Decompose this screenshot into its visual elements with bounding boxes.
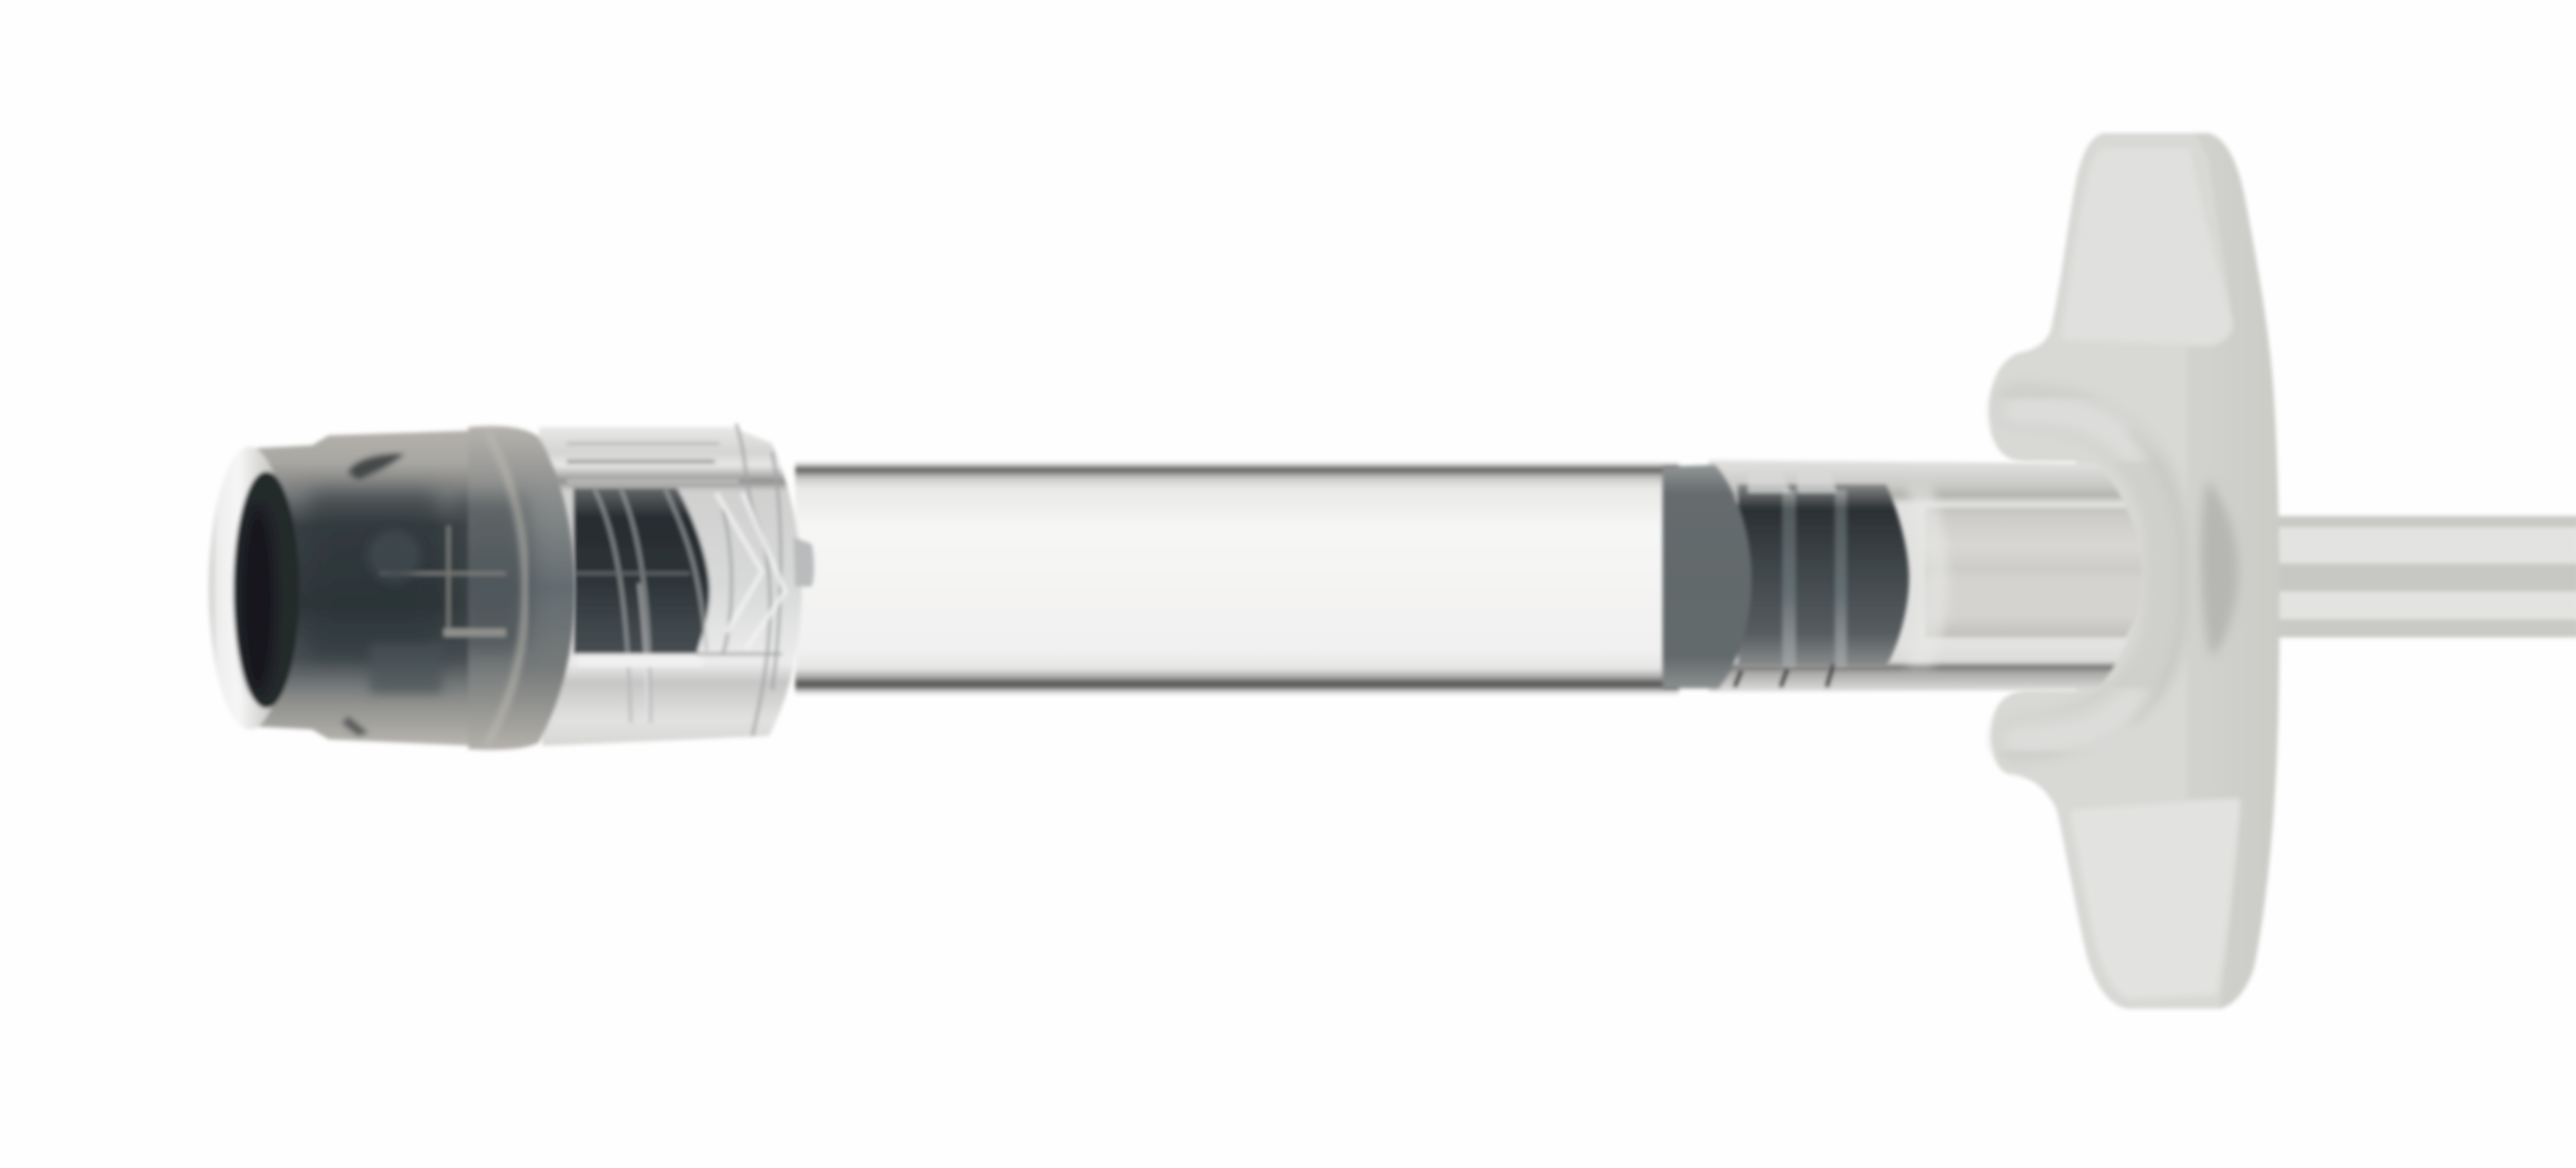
stopper dark ribs [1738,485,1909,667]
central boss with plunger seat [2201,480,2238,657]
cap body [242,430,477,746]
cap rim [209,447,291,730]
threaded stopper inside housing [574,488,710,654]
rubber stopper [1663,465,1909,689]
clip ring around barrel [2018,408,2170,739]
clear housing [539,427,802,746]
stopper scratches [1735,664,1833,687]
cap opening [233,472,299,708]
tip cap [209,426,575,750]
cap dark core [309,489,437,660]
finger flange [1989,133,2280,1009]
crystal hub facets [723,424,781,736]
cap moulded detail lines [379,526,506,634]
stopper rib highlights [1782,489,1796,667]
plunger rod [2267,516,2576,638]
lower thumb pad [2070,799,2240,999]
hub nub [794,537,814,587]
bright band [579,654,703,667]
glass barrel [795,462,1679,695]
luer lock adapter [539,424,814,746]
cap notches [348,453,404,480]
flange right edge shading [2187,133,2280,1009]
stopper front face [1663,465,1752,689]
cap collar [469,426,575,750]
thread lines [595,489,706,723]
plunger rod inside barrel [1926,508,2142,638]
flange silhouette [1989,133,2280,1009]
housing ribs [567,461,714,462]
rear barrel seen through flange [1709,460,2142,692]
upper thumb pad [2062,148,2233,345]
